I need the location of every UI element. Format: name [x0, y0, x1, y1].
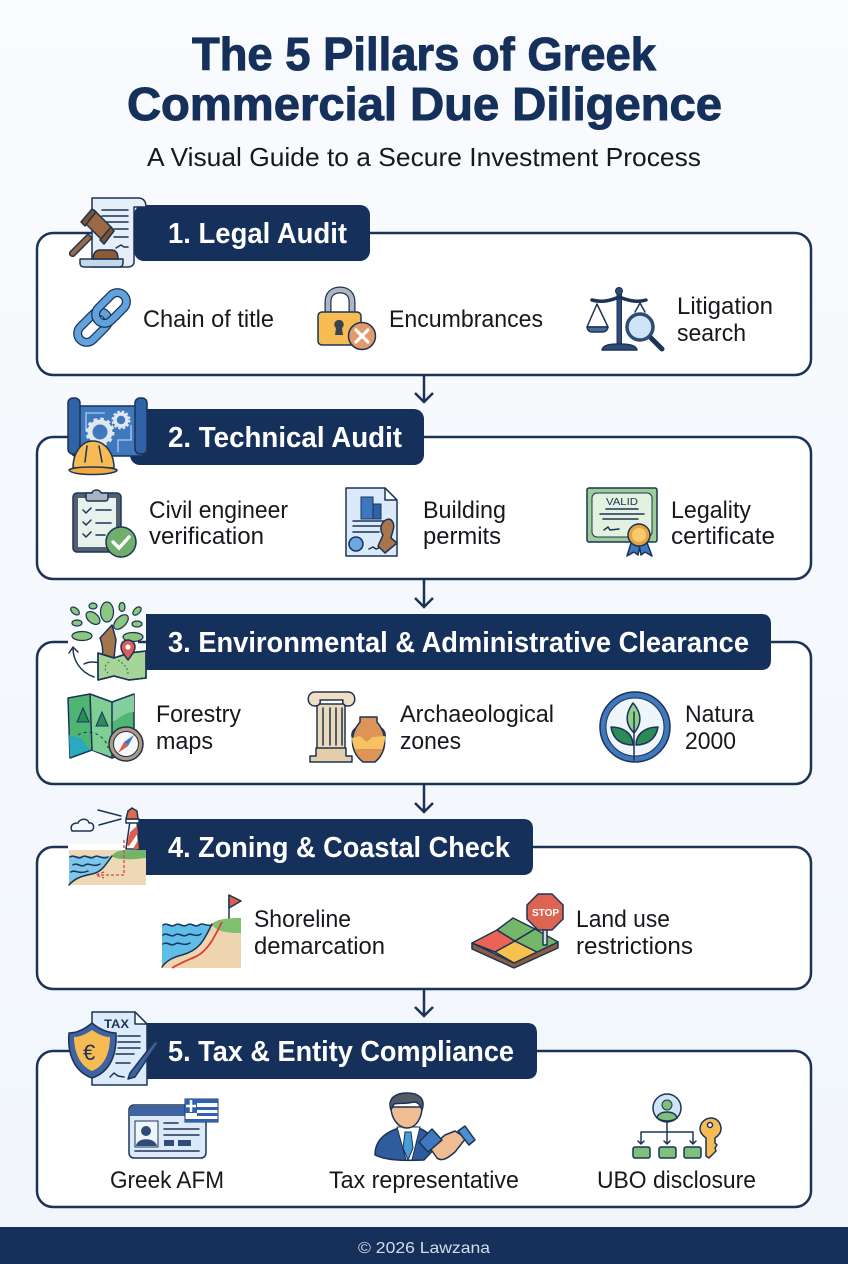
icon: ionic column and amphora: [308, 692, 385, 762]
icon: UBO ownership tree and key: [633, 1094, 721, 1158]
label: Encumbrances: Encumbrances: [389, 306, 543, 333]
label: Shoreline demarcation: [254, 906, 385, 960]
subtitle: A Visual Guide to a Secure Investment Process: [147, 142, 701, 172]
arrow: step 3 to 4: [415, 785, 433, 812]
panel: 4. Zoning & Coastal Check: [37, 808, 811, 989]
footer: © 2026 Lawzana: [358, 1240, 490, 1257]
label: Litigation search: Litigation: [677, 293, 773, 320]
title: Commercial Due Diligence: [127, 78, 722, 130]
panel: 5. Tax & Entity Compliance: [37, 1012, 811, 1207]
title: [127, 28, 722, 130]
heading: 4. Zoning & Coastal Check: 4. Zoning & Coastal Check: [168, 832, 510, 864]
heading: 4. Zoning & Coastal Check: [137, 819, 533, 875]
icon: forestry map with compass: [68, 694, 143, 761]
footer: [0, 1227, 848, 1264]
icon: padlock with cross: [318, 290, 376, 350]
panel: 2. Technical Audit: [37, 398, 811, 579]
heading: 3. Environmental & Administrative Clearance: [146, 614, 771, 670]
label: Litigation search: search: [677, 320, 746, 347]
icon: VALID certificate: [587, 488, 657, 556]
heading: 5. Tax & Entity Compliance: [140, 1023, 537, 1079]
label: Legality certificate: Legality: [671, 497, 751, 524]
icon: tax document, euro shield and pen: TAX: [104, 1017, 129, 1031]
label: Land use restrictions: restrictions: [576, 933, 693, 960]
icon: tax document, euro shield and pen: €: [83, 1040, 95, 1065]
icon: tree, map pin and map: [69, 602, 146, 680]
icon: building permit with stamp: [346, 488, 397, 556]
label: Shoreline demarcation: demarcation: [254, 933, 385, 960]
icon: AFM ID card with Greek flag: [129, 1099, 218, 1158]
label: Natura 2000: [685, 701, 755, 755]
heading: 1. Legal Audit: [134, 205, 370, 261]
icon: clipboard with check: [73, 490, 136, 557]
label: Civil engineer verification: verification: [149, 523, 264, 550]
label: Legality certificate: certificate: [671, 523, 775, 550]
heading: 3. Environmental & Administrative Clearance: 3. Environmental & Administrative Clearance: [168, 627, 749, 659]
icon: land use map with stop sign: STOP: [532, 907, 559, 919]
icon: gavel and scroll: [70, 198, 146, 267]
icon: tax representative handshake: [375, 1093, 475, 1160]
icon: scales and magnifier: [587, 288, 662, 350]
heading: 2. Technical Audit: 2. Technical Audit: [168, 422, 402, 454]
label: Land use restrictions: Land use: [576, 906, 670, 933]
label: Shoreline demarcation: Shoreline: [254, 906, 351, 933]
icon: chain links: [74, 289, 130, 346]
icon: Natura 2000 leaf badge: [600, 692, 670, 762]
label: Building permits: permits: [423, 523, 501, 550]
panel: 1. Legal Audit: [37, 198, 811, 375]
heading: 5. Tax & Entity Compliance: 5. Tax & Entity Compliance: [168, 1036, 514, 1068]
icon: VALID certificate: VALID: [606, 496, 638, 508]
icon: blueprint, gears and hard hat: [68, 398, 147, 475]
label: Forestry maps: Forestry: [156, 701, 241, 728]
panel: 3. Environmental & Administrative Clearance: [37, 602, 811, 784]
label: Greek AFM: Greek AFM: [110, 1167, 224, 1194]
heading: 2. Technical Audit: [130, 409, 424, 465]
title: The 5 Pillars of Greek: [192, 28, 656, 80]
label: Building permits: [423, 497, 506, 550]
label: UBO disclosure: UBO disclosure: [597, 1167, 756, 1194]
label: Natura 2000: Natura: [685, 701, 755, 728]
label: Archaeological zones: Archaeological: [400, 701, 554, 728]
arrow: step 2 to 3: [415, 580, 433, 607]
label: Civil engineer verification: [149, 497, 288, 550]
label: Building permits: Building: [423, 497, 506, 524]
label: Tax representative: Tax representative: [329, 1167, 519, 1194]
icon: shoreline demarcation: [162, 895, 241, 968]
label: Forestry maps: maps: [156, 728, 213, 755]
arrow: step 4 to 5: [415, 990, 433, 1016]
arrow: step 1 to 2: [415, 376, 433, 402]
label: Litigation search: [677, 293, 773, 347]
label: Legality certificate: [671, 497, 775, 550]
icon: tax document, euro shield and pen: [69, 1012, 158, 1085]
label: Archaeological zones: zones: [400, 728, 461, 755]
label: Natura 2000: 2000: [685, 728, 736, 755]
icon: land use map with stop sign: [472, 894, 563, 968]
label: Land use restrictions: [576, 906, 693, 960]
heading: 1. Legal Audit: 1. Legal Audit: [168, 218, 347, 250]
label: Chain of title: Chain of title: [143, 306, 274, 333]
label: Forestry maps: [156, 701, 241, 755]
icon: lighthouse on coast: [69, 808, 146, 885]
label: Archaeological zones: [400, 701, 554, 755]
label: Civil engineer verification: Civil engineer: [149, 497, 288, 524]
